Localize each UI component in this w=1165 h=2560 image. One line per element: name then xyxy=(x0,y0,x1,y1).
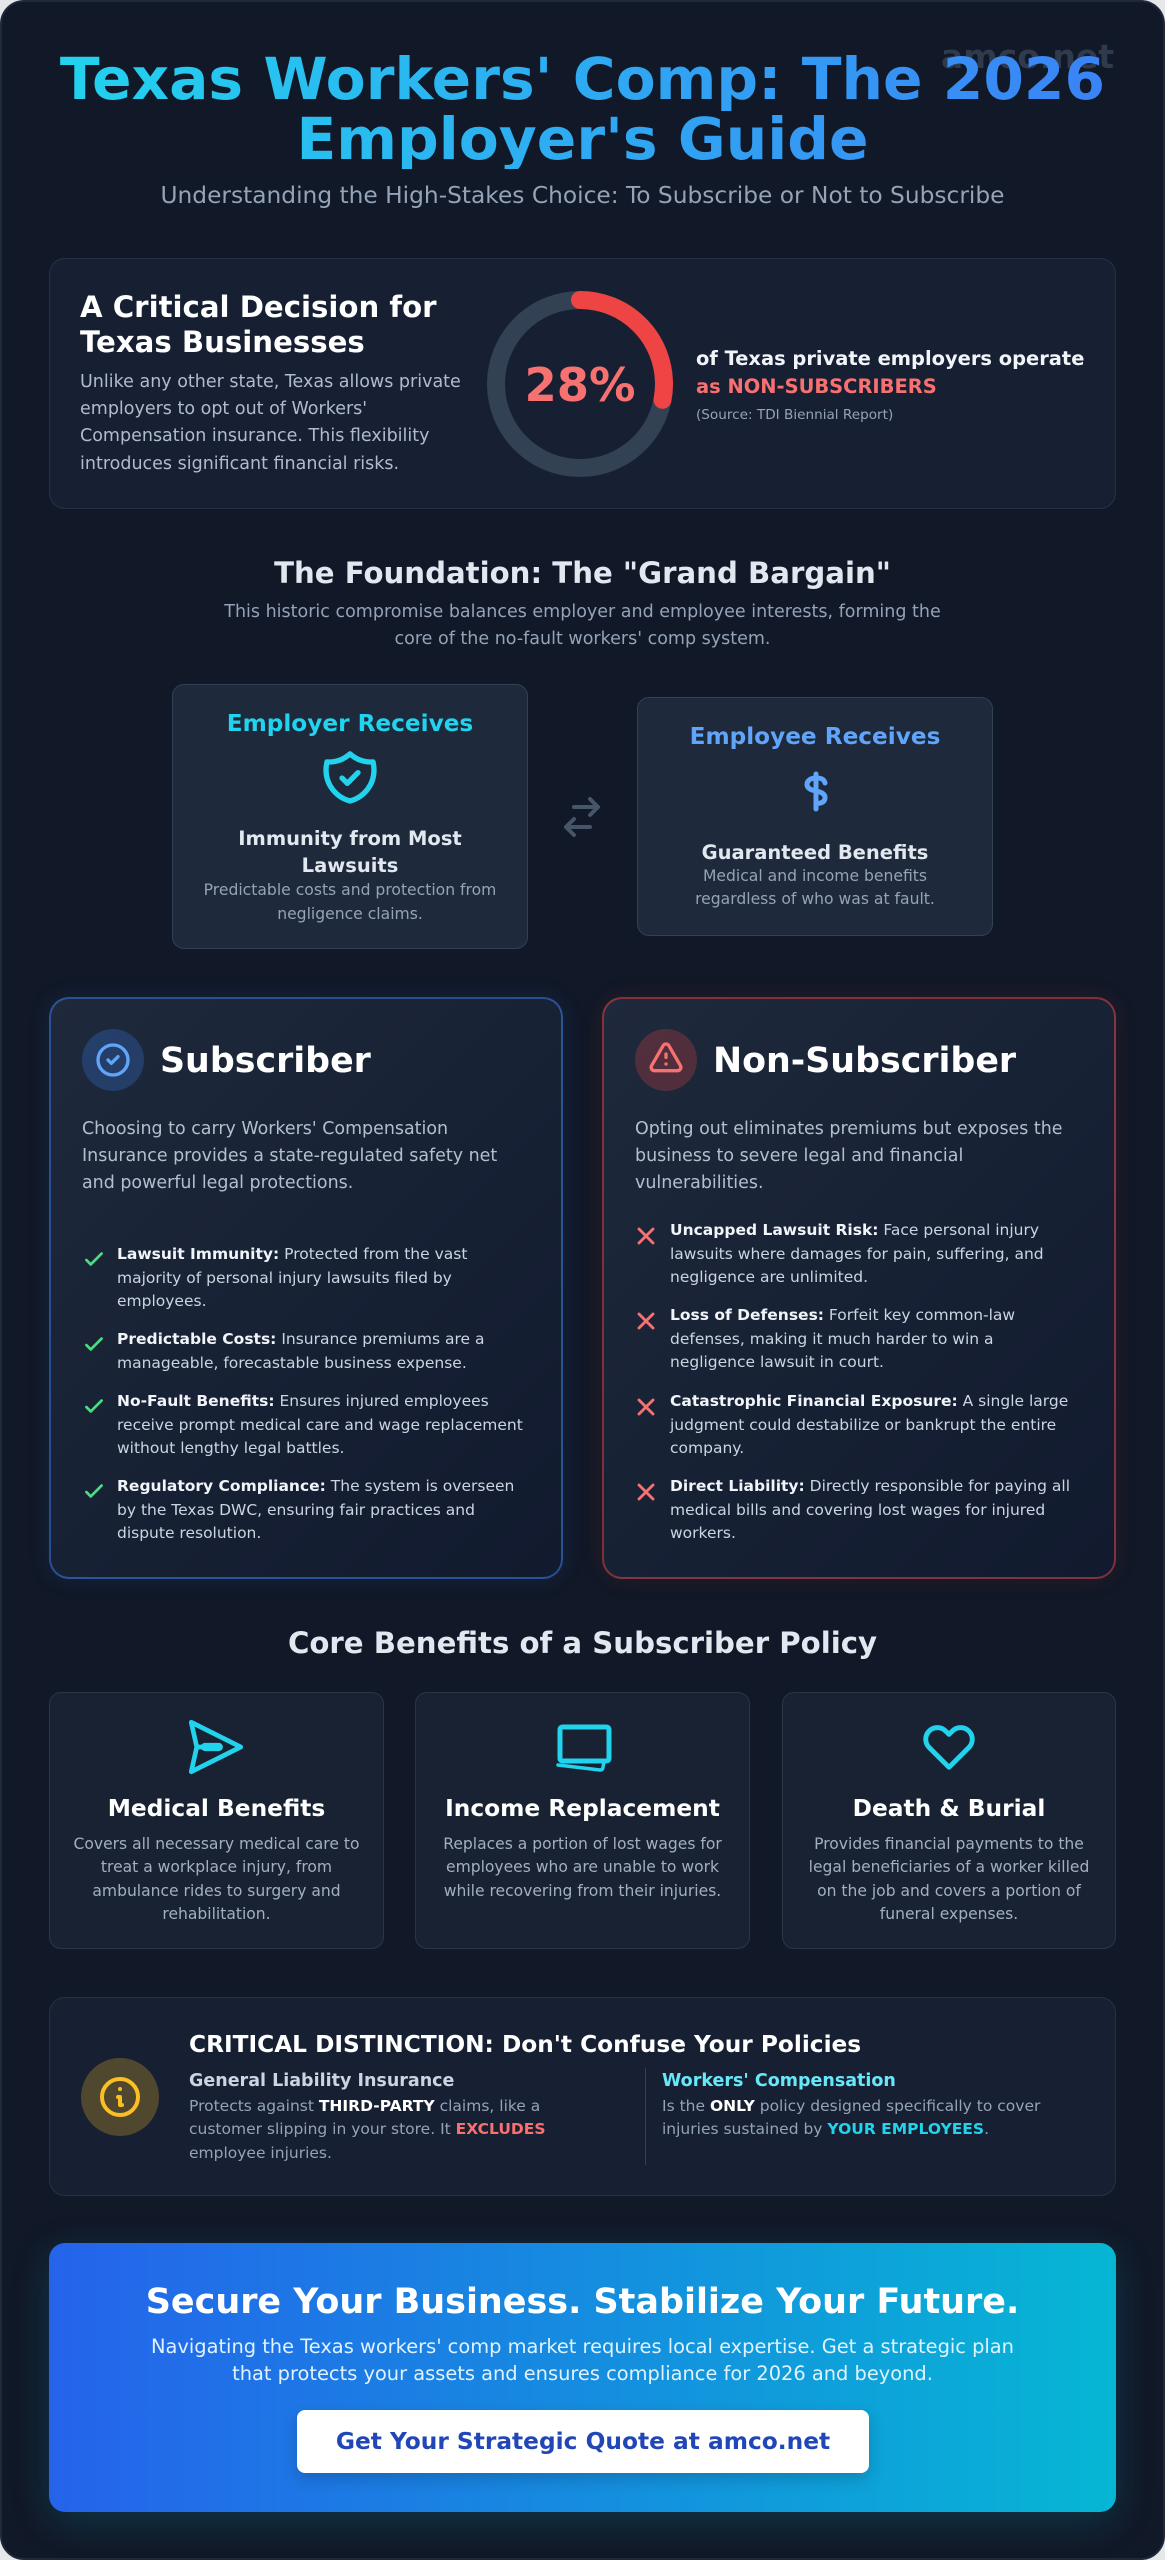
text: grand bargain intro: This historic compromise balances employer and employee interests, forming the xyxy=(224,602,941,622)
text: critical decision body: Compensation insurance. This flexibility xyxy=(80,426,430,446)
panel intro xyxy=(635,1119,1063,1193)
card text: Replaces a portion of lost wages for xyxy=(443,1835,722,1853)
text: critical decision body xyxy=(80,372,461,474)
stat text: of Texas private employers operate xyxy=(696,347,1084,370)
item: catastrophic financial exposure xyxy=(638,1392,1068,1457)
column text: employee injuries. xyxy=(189,2144,332,2162)
card text: Covers all necessary medical care to xyxy=(74,1835,359,1853)
item: lawsuit immunity: majority of personal injury lawsuits filed by xyxy=(117,1268,452,1286)
item: no-fault benefits: without lengthy legal battles. xyxy=(117,1439,344,1457)
card text: on the job and covers a portion of xyxy=(817,1882,1081,1900)
card text: funeral expenses. xyxy=(880,1905,1018,1923)
heading: core benefits: Core Benefits of a Subscriber Policy xyxy=(288,1626,877,1660)
risk list xyxy=(638,1221,1070,1542)
call to action xyxy=(49,2243,1116,2512)
benefit description: negligence claims. xyxy=(277,905,423,923)
item: predictable costs xyxy=(85,1330,485,1372)
panel heading: Subscriber xyxy=(160,1041,371,1081)
card: employer receives xyxy=(172,684,528,949)
card text: legal beneficiaries of a worker killed xyxy=(809,1858,1089,1876)
column text: Is the ONLY policy designed specifically to cover xyxy=(662,2097,1040,2115)
panel: critical distinction xyxy=(49,1997,1116,2196)
watermark: amco.net: amco.net xyxy=(941,37,1114,76)
card text xyxy=(74,1835,359,1923)
benefit description xyxy=(204,881,496,923)
item: direct liability: medical bills and covering lost wages for injured xyxy=(670,1500,1045,1518)
panel: critical decision xyxy=(49,258,1116,509)
card text: employees who are unable to work xyxy=(446,1858,719,1876)
card text: treat a workplace injury, from xyxy=(101,1858,332,1876)
panel intro: Choosing to carry Workers' Compensation xyxy=(82,1119,448,1139)
icon: warning badge xyxy=(635,1029,697,1091)
icon: paper plane xyxy=(188,1720,244,1774)
item: direct liability: workers. xyxy=(670,1524,736,1542)
card title: Death & Burial xyxy=(853,1795,1045,1822)
text: grand bargain intro: core of the no-fault workers' comp system. xyxy=(395,629,770,649)
column text xyxy=(662,2097,1040,2138)
item: no-fault benefits: No-Fault Benefits: Ensures injured employees xyxy=(117,1392,489,1410)
card heading: Employee Receives xyxy=(690,723,940,750)
item: lawsuit immunity: Lawsuit Immunity: Protected from the vast xyxy=(117,1245,467,1263)
card text: while recovering from their injuries. xyxy=(444,1882,721,1900)
title: Texas Workers' Comp: The 2026 xyxy=(60,45,1105,113)
benefit list xyxy=(85,1245,523,1542)
heading: critical decision: A Critical Decision for xyxy=(80,290,437,324)
distinction heading: CRITICAL DISTINCTION: Don't Confuse Your Policies xyxy=(189,2031,861,2058)
icon: cash notes xyxy=(556,1724,612,1772)
text: critical decision body: employers to opt out of Workers' xyxy=(80,399,367,419)
card: medical benefits xyxy=(49,1692,384,1949)
panel intro: Opting out eliminates premiums but exposes the xyxy=(635,1119,1063,1139)
item: uncapped lawsuit risk: lawsuits where damages for pain, suffering, and xyxy=(670,1244,1044,1262)
text: critical decision body: Unlike any other state, Texas allows private xyxy=(80,372,461,392)
item: regulatory compliance: Regulatory Compliance: The system is overseen xyxy=(117,1477,514,1495)
item: predictable costs: manageable, forecastable business expense. xyxy=(117,1354,467,1372)
card text xyxy=(809,1835,1089,1923)
item: loss of defenses: Loss of Defenses: Forfeit key common-law xyxy=(670,1306,1015,1324)
panel intro: and powerful legal protections. xyxy=(82,1173,353,1193)
panel heading: Non-Subscriber xyxy=(713,1041,1016,1081)
stat caption xyxy=(696,347,1084,423)
benefit title xyxy=(238,827,462,877)
item: lawsuit immunity: employees. xyxy=(117,1292,207,1310)
text: grand bargain intro xyxy=(224,602,941,649)
heading: critical decision: Texas Businesses xyxy=(80,325,365,359)
icon: info badge xyxy=(81,2058,159,2136)
item: regulatory compliance: by the Texas DWC, ensuring fair practices and xyxy=(117,1500,475,1518)
benefit title: Immunity from Most xyxy=(238,827,462,850)
title: Employer's Guide xyxy=(296,105,869,173)
card text xyxy=(443,1835,722,1900)
icon: check circle badge xyxy=(82,1029,144,1091)
icon: heart xyxy=(923,1725,975,1770)
card title: Income Replacement xyxy=(445,1795,720,1822)
item: catastrophic financial exposure: Catastrophic Financial Exposure: A single large xyxy=(670,1392,1068,1410)
cta button: Get Your Strategic Quote at amco.net xyxy=(336,2428,830,2455)
cta text: that protects your assets and ensures compliance for 2026 and beyond. xyxy=(232,2362,933,2385)
item: catastrophic financial exposure: company. xyxy=(670,1439,744,1457)
item: regulatory compliance: dispute resolution. xyxy=(117,1524,261,1542)
stat text: as NON-SUBSCRIBERS xyxy=(696,375,937,398)
panel: subscriber xyxy=(49,997,563,1579)
item: catastrophic financial exposure: judgment could destabilize or bankrupt the entire xyxy=(670,1416,1056,1434)
card text: rehabilitation. xyxy=(162,1905,271,1923)
card heading: Employer Receives xyxy=(227,710,473,737)
card: employee receives xyxy=(637,697,993,936)
column text: Protects against THIRD-PARTY claims, like a xyxy=(189,2097,540,2115)
benefit description: Medical and income benefits xyxy=(703,867,927,885)
card text: Provides financial payments to the xyxy=(814,1835,1084,1853)
cta heading: Secure Your Business. Stabilize Your Future. xyxy=(146,2282,1019,2322)
item: lawsuit immunity xyxy=(85,1245,468,1310)
donut value: 28% xyxy=(524,358,636,412)
card title: Medical Benefits xyxy=(108,1795,325,1822)
subtitle: Understanding the High-Stakes Choice: To Subscribe or Not to Subscribe xyxy=(160,182,1005,209)
item: loss of defenses: negligence lawsuit in court. xyxy=(670,1353,884,1371)
item: predictable costs: Predictable Costs: Insurance premiums are a xyxy=(117,1330,485,1348)
card text: ambulance rides to surgery and xyxy=(92,1882,341,1900)
cta button xyxy=(297,2410,869,2473)
panel: non-subscriber xyxy=(602,997,1116,1579)
cta text: Navigating the Texas workers' comp market requires local expertise. Get a strategic plan xyxy=(151,2335,1014,2358)
card: income replacement xyxy=(415,1692,750,1949)
heading: critical decision xyxy=(80,290,437,359)
text: critical decision body: introduces significant financial risks. xyxy=(80,454,399,474)
item: uncapped lawsuit risk: Uncapped Lawsuit Risk: Face personal injury xyxy=(670,1221,1039,1239)
cta text xyxy=(151,2335,1014,2385)
item: loss of defenses xyxy=(638,1306,1015,1371)
icon: exchange arrows xyxy=(564,796,600,837)
icon: dollar sign xyxy=(804,772,828,812)
column title: General Liability Insurance xyxy=(189,2071,454,2091)
heading: grand bargain: The Foundation: The "Grand Bargain" xyxy=(274,556,891,590)
column title: Workers' Compensation xyxy=(662,2071,896,2091)
source note: (Source: TDI Biennial Report) xyxy=(696,407,893,423)
column: workers' compensation xyxy=(645,2068,1115,2165)
benefit description: regardless of who was at fault. xyxy=(695,890,935,908)
stat text xyxy=(696,347,1084,398)
icon: shield check xyxy=(323,751,377,804)
item: loss of defenses: defenses, making it much harder to win a xyxy=(670,1330,994,1348)
title xyxy=(49,49,1116,169)
item: no-fault benefits: receive prompt medical care and wage replacement xyxy=(117,1416,523,1434)
item: uncapped lawsuit risk xyxy=(638,1221,1044,1286)
panel intro xyxy=(82,1119,497,1193)
benefit description: Predictable costs and protection from xyxy=(204,881,496,899)
column text: customer slipping in your store. It EXCLUDES xyxy=(189,2120,546,2138)
column text xyxy=(189,2097,546,2162)
panel intro: business to severe legal and financial xyxy=(635,1146,963,1166)
column text: injuries sustained by YOUR EMPLOYEES. xyxy=(662,2120,989,2138)
benefit title: Lawsuits xyxy=(302,854,398,877)
item: direct liability: Direct Liability: Directly responsible for paying all xyxy=(670,1477,1070,1495)
item: no-fault benefits xyxy=(85,1392,523,1457)
item: uncapped lawsuit risk: negligence are unlimited. xyxy=(670,1268,868,1286)
card: death and burial xyxy=(782,1692,1116,1949)
column: general liability xyxy=(189,2071,546,2162)
item: regulatory compliance xyxy=(85,1477,514,1542)
benefit title: Guaranteed Benefits xyxy=(702,841,928,864)
benefit description xyxy=(695,867,935,908)
panel intro: vulnerabilities. xyxy=(635,1173,764,1193)
chart: 28% donut xyxy=(487,291,673,477)
item: direct liability xyxy=(638,1477,1070,1542)
panel intro: Insurance provides a state-regulated safety net xyxy=(82,1146,497,1166)
